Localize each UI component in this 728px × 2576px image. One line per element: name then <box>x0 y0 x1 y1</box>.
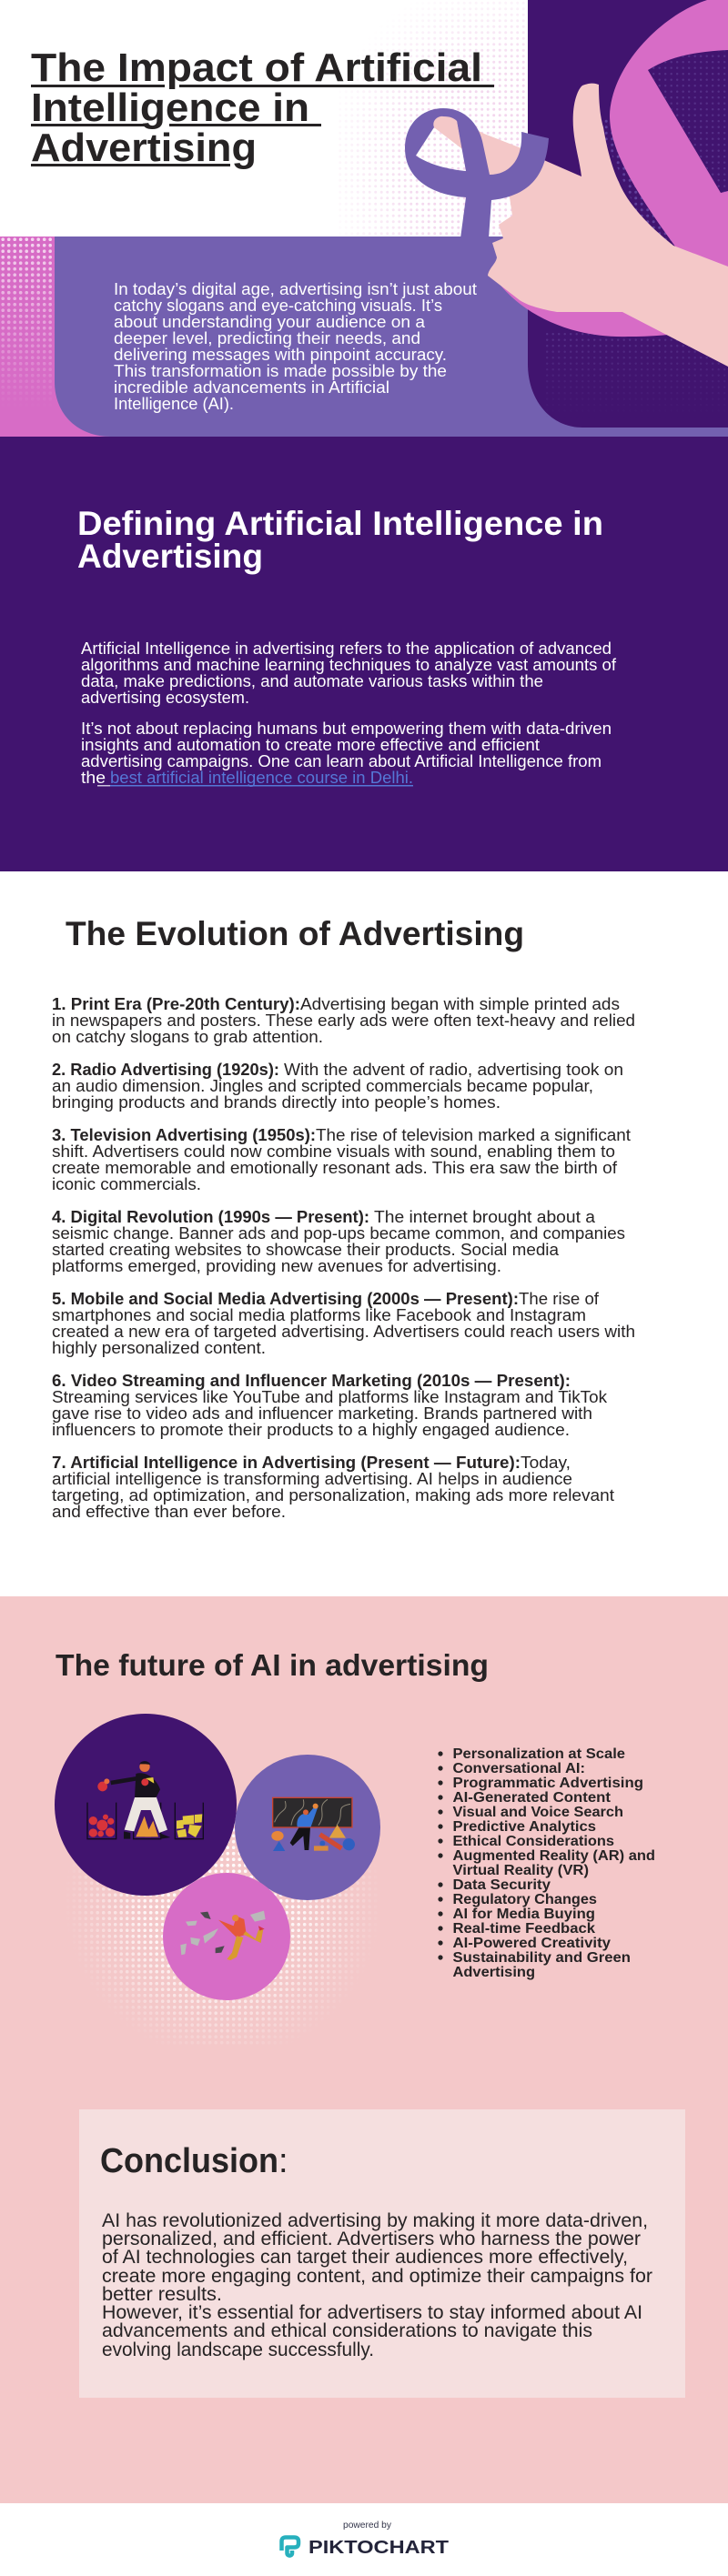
icon: purple circle with jars illustration <box>55 1714 237 1896</box>
text block: conclusion body: However, it’s essential for advertisers to stay informed about AI <box>102 2302 642 2323</box>
title: The Impact of Artificial <box>31 45 482 90</box>
panel: evolution of advertising <box>0 871 728 1596</box>
title: Intelligence in <box>31 86 309 130</box>
text block: radio: With the advent of radio, advertising took on <box>284 1061 623 1079</box>
text block: digital revolution: 4. Digital Revolution (1990s — Present): <box>52 1208 369 1226</box>
text block: conclusion body <box>102 2210 652 2360</box>
intro text: catchy slogans and eye-catching visuals. It’s <box>114 297 442 315</box>
bullet list: future trends: Conversational AI: <box>453 1761 585 1776</box>
text block: print era: on catchy slogans to grab attention. <box>52 1028 323 1046</box>
text block: conclusion body: evolving landscape successfully. <box>102 2340 374 2360</box>
panel: medium purple intro background <box>55 236 728 437</box>
icon: pink circle with flying papers illustration <box>163 1873 290 2000</box>
text block: definition: best artificial intelligence course in Delhi. <box>110 769 413 787</box>
intro text: incredible advancements in Artificial <box>114 378 389 397</box>
bullet list: future trends: AI for Media Buying <box>453 1907 595 1922</box>
icon: hand <box>433 84 728 367</box>
text block: mobile and social: 5. Mobile and Social Media Advertising (2000s — Present): <box>52 1290 519 1308</box>
panel: conclusion <box>79 2109 685 2398</box>
bullet list: future trends: Personalization at Scale <box>453 1746 625 1762</box>
icon: medium purple circle with chalkboard illustration <box>235 1755 380 1900</box>
footer: powered by Piktochart <box>0 2503 728 2576</box>
text block: definition: advertising campaigns. One can learn about Artificial Intelligence from <box>81 752 602 770</box>
heading: defining AI <box>77 505 603 575</box>
bullet list: future trends <box>438 1746 655 1980</box>
text block: artificial intelligence: 7. Artificial Intelligence in Advertising (Present — Future): <box>52 1454 521 1472</box>
text block: artificial intelligence: and effective than ever before. <box>52 1503 286 1521</box>
text block: video and influencers: 6. Video Streaming and Influencer Marketing (2010s — Present): <box>52 1372 571 1390</box>
text block: definition: the <box>81 769 106 787</box>
intro text: Intelligence (AI). <box>114 395 234 413</box>
text block: video and influencers <box>52 1372 608 1439</box>
heading: conclusion: : <box>278 2142 288 2180</box>
panel: dark purple rounded block <box>528 0 728 428</box>
text block: television: iconic commercials. <box>52 1175 201 1193</box>
intro text: In today’s digital age, advertising isn’t just about <box>114 280 477 298</box>
intro text: deeper level, predicting their needs, and <box>114 329 420 347</box>
intro text: about understanding your audience on a <box>114 313 426 331</box>
text block: mobile and social: highly personalized content. <box>52 1339 266 1357</box>
text block: print era: Advertising began with simple printed ads <box>300 995 620 1013</box>
text block: digital revolution: started creating websites to showcase their products. Social media <box>52 1241 560 1259</box>
bullet list: future trends: Ethical Considerations <box>453 1834 614 1849</box>
text block: digital revolution: platforms emerged, providing new avenues for advertising. <box>52 1257 501 1275</box>
hero section <box>0 0 728 437</box>
text block: digital revolution: The internet brought about a <box>374 1208 596 1226</box>
text block: mobile and social: The rise of <box>519 1290 600 1308</box>
icon: dotted band beside ribbon <box>596 118 678 255</box>
panel: left pink strip <box>0 236 110 437</box>
text block: definition <box>81 639 617 787</box>
title <box>31 45 494 170</box>
intro text: delivering messages with pinpoint accuracy. <box>114 346 447 364</box>
bullet list: future trends: Real-time Feedback <box>453 1921 595 1937</box>
text block: print era: 1. Print Era (Pre-20th Century): <box>52 995 300 1013</box>
panel: future of AI <box>0 1596 728 2503</box>
bullet list: future trends: Sustainability and Green <box>453 1950 631 1966</box>
text block: mobile and social: smartphones and social media platforms like Facebook and Instagram <box>52 1306 586 1324</box>
heading: defining AI: Defining Artificial Intelligence in <box>77 505 603 542</box>
text block: video and influencers: influencers to promote their products to a highly engaged audience. <box>52 1421 570 1439</box>
heading: future of AI: The future of AI in advertising <box>56 1648 489 1682</box>
bullet list: future trends: Regulatory Changes <box>453 1892 597 1907</box>
text block: definition: It’s not about replacing humans but empowering them with data-driven <box>81 719 612 738</box>
footer: powered by Piktochart: PIKTOCHART <box>308 2538 449 2558</box>
icon: small purple ribbon <box>405 108 549 238</box>
footer: powered by Piktochart: powered by <box>343 2521 391 2531</box>
text block: radio <box>52 1061 623 1112</box>
panel: defining AI <box>0 437 728 871</box>
text block: conclusion body: better results. <box>102 2284 222 2305</box>
text block: conclusion body: advancements and ethical considerations to navigate this <box>102 2320 592 2341</box>
bullet list: future trends: Augmented Reality (AR) and <box>453 1848 655 1864</box>
text block: definition: advertising ecosystem. <box>81 689 249 707</box>
text block: television: shift. Advertisers could now combine visuals with sound, enabling them to <box>52 1142 615 1161</box>
text block: conclusion body: personalized, and efficient. Advertisers who harness the power <box>102 2229 641 2249</box>
text block: artificial intelligence <box>52 1454 614 1521</box>
text block: television: create memorable and emotionally resonant ads. This era saw the birth of <box>52 1159 618 1177</box>
intro text <box>114 280 477 413</box>
bullet list: future trends: Advertising <box>453 1965 535 1980</box>
text block: artificial intelligence: artificial intelligence is transforming advertising. AI helps in audience <box>52 1470 572 1488</box>
text block: print era: in newspapers and posters. These early ads were often text-heavy and relied <box>52 1011 635 1030</box>
text block: digital revolution: seismic change. Banner ads and pop-ups became common, and companies <box>52 1224 625 1243</box>
text block: digital revolution <box>52 1208 625 1275</box>
heading: evolution: The Evolution of Advertising <box>66 915 524 952</box>
bullet list: future trends: Data Security <box>453 1877 551 1893</box>
bullet list: future trends: AI-Generated Content <box>453 1790 612 1806</box>
text block: mobile and social: created a new era of targeted advertising. Advertisers could reach users with <box>52 1323 635 1341</box>
heading: conclusion: Conclusion <box>100 2142 278 2180</box>
title: Advertising <box>31 126 257 170</box>
text block: video and influencers: Streaming services like YouTube and platforms like Instagram and TikTok <box>52 1388 608 1406</box>
text block: definition: data, make predictions, and automate various tasks within the <box>81 672 543 690</box>
text block: print era <box>52 995 635 1046</box>
icon: Piktochart logo mark <box>282 2538 298 2556</box>
text block: radio: 2. Radio Advertising (1920s): <box>52 1061 279 1079</box>
text block: television: The rise of television marked a significant <box>316 1126 631 1144</box>
intro text: This transformation is made possible by the <box>114 362 447 380</box>
heading: defining AI: Advertising <box>77 538 263 575</box>
text block: conclusion body: AI has revolutionized advertising by making it more data-driven, <box>102 2210 648 2231</box>
text block: mobile and social <box>52 1290 635 1357</box>
text block: television: 3. Television Advertising (1950s): <box>52 1126 316 1144</box>
text block: definition: Artificial Intelligence in advertising refers to the application of advanced <box>81 639 612 658</box>
text block: video and influencers: gave rise to video ads and influencer marketing. Brands partnered with <box>52 1404 592 1423</box>
text block: conclusion body: of AI technologies can target their audiences more effectively, <box>102 2247 628 2268</box>
bullet list: future trends: AI-Powered Creativity <box>453 1936 611 1951</box>
text block: conclusion body: create more engaging content, and optimize their campaigns for <box>102 2266 652 2287</box>
text block: definition: algorithms and machine learning techniques to analyze vast amounts of <box>81 656 617 674</box>
text block: artificial intelligence: Today, <box>521 1454 571 1472</box>
bullet list: future trends: Programmatic Advertising <box>453 1776 643 1791</box>
text block: radio: bringing products and brands directly into people’s homes. <box>52 1093 500 1112</box>
icon: large pink ribbon <box>491 0 728 337</box>
bullet list: future trends: Virtual Reality (VR) <box>453 1863 589 1878</box>
text block: artificial intelligence: targeting, ad optimization, and personalization, making ads more relevant <box>52 1486 614 1504</box>
bullet list: future trends: Predictive Analytics <box>453 1819 596 1835</box>
text block: definition: insights and automation to create more effective and efficient <box>81 736 540 754</box>
text block: radio: an audio dimension. Jingles and scripted commercials became popular, <box>52 1077 593 1095</box>
bullet list: future trends: Visual and Voice Search <box>453 1805 623 1820</box>
text block: television <box>52 1126 631 1193</box>
